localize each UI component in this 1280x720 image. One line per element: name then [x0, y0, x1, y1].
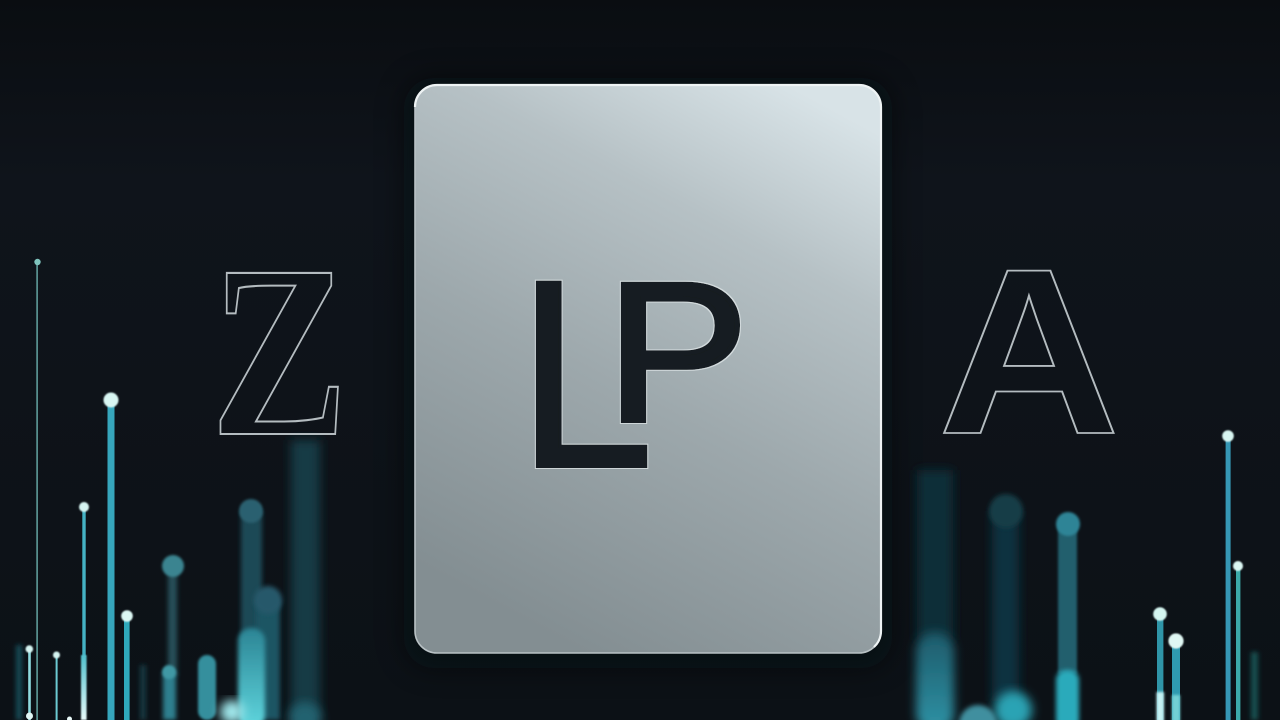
letter L: L	[517, 224, 654, 524]
blurred light bars: left	[16, 440, 321, 720]
plate top and right highlight	[415, 85, 881, 647]
plate surface	[415, 85, 881, 653]
letter Z outline: Z	[211, 216, 348, 488]
sharp light lines: left	[26, 259, 133, 720]
letter P: P	[606, 241, 749, 463]
metal plate	[415, 85, 881, 653]
blurred light bars: right	[916, 470, 1258, 720]
sharp light lines: right	[1153, 430, 1243, 720]
logo letters LP	[517, 224, 749, 524]
plate shadow	[404, 78, 892, 668]
letter A outline: A	[938, 220, 1120, 483]
